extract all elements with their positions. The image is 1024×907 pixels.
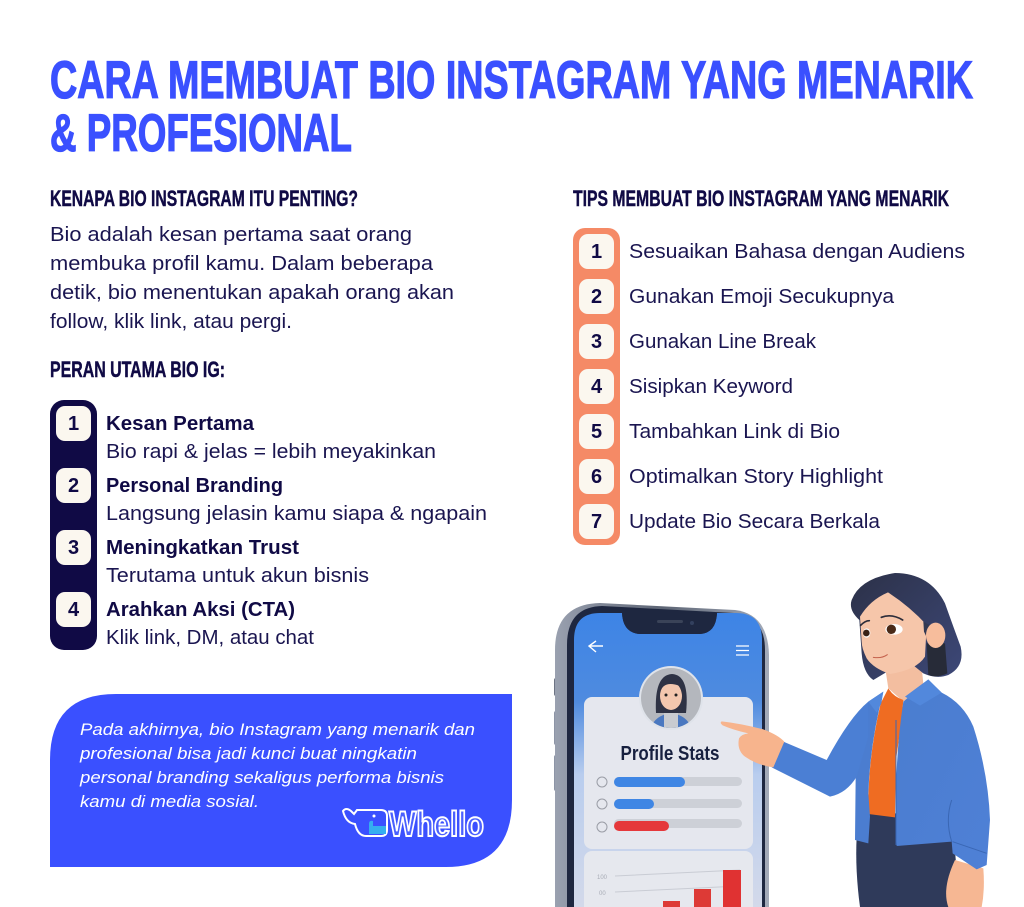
text block: intro paragraph: detik, bio menentukan apakah orang akan [50,282,454,304]
tips text: Sesuaikan Bahasa dengan Audiens [629,241,965,263]
number rail: coral: 1 [591,241,602,263]
item: personal branding [106,475,487,525]
eyebrows [861,616,903,625]
heading: kenapa bio penting: KENAPA BIO INSTAGRAM ITU PENTING? [50,186,358,211]
number rail: coral: 5 [591,421,602,443]
text block: intro paragraph [50,224,454,333]
tips text: Sisipkan Keyword [629,376,793,398]
face [860,592,927,674]
neck [885,667,923,702]
item: personal branding: Langsung jelasin kamu siapa & ngapain [106,503,487,525]
tips text: Update Bio Secara Berkala [629,511,881,533]
text block: intro paragraph: membuka profil kamu. Dalam beberapa [50,253,434,275]
chart card: 100 [597,875,608,881]
item: kesan pertama: Bio rapi & jelas = lebih meyakinkan [106,441,436,463]
number rail: navy: 2 [68,475,79,497]
number rail: coral: 6 [591,466,602,488]
stats bars [597,777,742,832]
sideburn [923,622,929,637]
item: meningkatkan trust [106,537,369,587]
tips text: Optimalkan Story Highlight [629,466,883,488]
text block: closing message: profesional bisa jadi kunci buat ningkatin [79,744,417,763]
logo: whello: Whello [389,805,484,844]
item: meningkatkan trust: Terutama untuk akun bisnis [106,565,369,587]
panel: tips list [573,228,965,545]
text block: closing message: personal branding sekaligus performa bisnis [79,768,445,787]
shirt [868,688,903,817]
panel: peran utama list [50,400,487,650]
item: meningkatkan trust: Meningkatkan Trust [106,537,299,559]
number rail: navy [50,400,97,650]
heading: peran utama: PERAN UTAMA BIO IG: [50,357,225,382]
chart card: 00 [599,891,606,897]
pointing arm [772,702,868,797]
item: arahkan aksi: Arahkan Aksi (CTA) [106,599,295,621]
collar [868,679,942,713]
pants [856,813,957,907]
label: profile stats: Profile Stats [620,743,720,765]
hair back [851,573,962,680]
icon: menu [736,646,749,655]
illustration: woman pointing [721,573,990,907]
number rail: coral: 3 [591,331,602,353]
text block: closing message: Pada akhirnya, bio Instagram yang menarik dan [80,720,475,739]
logo: whello [343,805,484,844]
avatar [639,666,703,732]
tips text [629,241,965,533]
panel: closing callout [50,694,512,867]
text block: closing message [79,720,475,811]
number rail: coral [573,228,620,545]
number rail: coral: 4 [591,376,603,398]
ear [926,623,945,648]
title: & PROFESIONAL [50,104,352,163]
number rail: coral: 7 [591,511,602,533]
tips text: Gunakan Line Break [629,331,817,353]
mouth [873,655,887,658]
illustration: phone [554,603,769,907]
number rail: coral: 2 [591,286,602,308]
number rail: navy: 3 [68,537,79,559]
jacket left panel [855,692,883,843]
chart card [584,851,753,907]
item: arahkan aksi: Klik link, DM, atau chat [106,627,314,649]
jacket right panel and sleeve [896,680,990,869]
tips text: Tambahkan Link di Bio [629,421,840,443]
tips text: Gunakan Emoji Secukupnya [629,286,895,308]
number rail: navy: 4 [68,599,80,621]
pointing hand [721,721,784,767]
number rail: navy: 1 [68,413,79,435]
text block: intro paragraph: follow, klik link, atau pergi. [50,311,292,333]
eyes [863,624,903,638]
icon: back arrow [589,641,603,652]
title [50,51,973,163]
hand [946,860,984,907]
text block: closing message: kamu di media sosial. [80,792,259,811]
dark hair underside [927,643,947,676]
item: personal branding: Personal Branding [106,475,283,497]
item: kesan pertama: Kesan Pertama [106,413,255,435]
item: arahkan aksi [106,599,314,649]
item: kesan pertama [106,413,436,463]
text block: intro paragraph: Bio adalah kesan pertama saat orang [50,224,412,246]
